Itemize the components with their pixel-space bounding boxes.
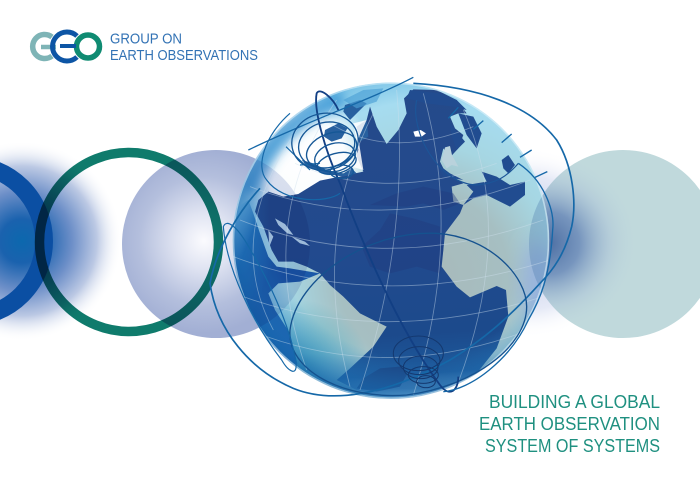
background ring: green [40, 152, 218, 332]
title: SYSTEM OF SYSTEMS [485, 436, 660, 456]
south america teal shading [278, 306, 362, 384]
logo text [110, 30, 258, 64]
arctic tangent ticks [286, 147, 320, 170]
satellite orbits [210, 77, 574, 396]
title: EARTH OBSERVATION [479, 414, 660, 434]
spiral: south atlantic [393, 336, 443, 388]
rim shading [233, 115, 532, 399]
lavender glow near right limb [520, 245, 547, 316]
title [479, 392, 660, 456]
white arctic islands [352, 120, 367, 170]
logo letter E [52, 32, 77, 61]
caribbean islands [268, 218, 310, 247]
pale rim highlight [233, 83, 549, 398]
orbit: top tangent [248, 77, 413, 150]
glare over north america [248, 99, 364, 206]
darker mid-ocean bands [443, 193, 460, 252]
arctic water top [343, 88, 383, 108]
background circle: pale teal [541, 150, 700, 338]
upper left limb glow [247, 98, 343, 193]
spiral: north america [287, 108, 363, 178]
logo text: EARTH OBSERVATIONS [110, 47, 258, 64]
antarctic shelf [357, 367, 407, 392]
globe [209, 76, 575, 399]
background halo behind globe [435, 148, 625, 338]
orbit: tilted equatorial ellipse [290, 233, 527, 396]
background circle: blurred blue glow [0, 141, 122, 341]
teal disc seen through globe [529, 196, 549, 290]
title: BUILDING A GLOBAL [489, 392, 660, 412]
globe land base [233, 82, 549, 399]
logo mark: GEO [33, 32, 100, 61]
logo text: GROUP ON [110, 30, 182, 48]
orbit: top right arc into europe [416, 100, 518, 185]
bottom shading [308, 358, 492, 398]
orbit: giant outer loop [210, 83, 574, 396]
orbit ticks at right limb [448, 107, 547, 177]
pacific ocean [232, 200, 320, 366]
atlantic ocean [255, 89, 508, 400]
orbit: upper left arc [262, 113, 340, 200]
logo letter O [76, 35, 100, 58]
background ring: blue [0, 165, 44, 317]
hudson bay and arctic waters [302, 100, 368, 177]
background circle: lilac [122, 150, 310, 338]
lilac disc seen through globe [233, 159, 310, 326]
orbit: right edge arc [443, 163, 553, 392]
logo letter G [33, 34, 56, 58]
orbit: polar diagonal [316, 91, 458, 392]
european seas [407, 90, 525, 207]
graticule [233, 90, 550, 395]
orbit: narrow left loop [223, 223, 296, 371]
iceland [413, 130, 426, 137]
british isles [442, 146, 458, 168]
